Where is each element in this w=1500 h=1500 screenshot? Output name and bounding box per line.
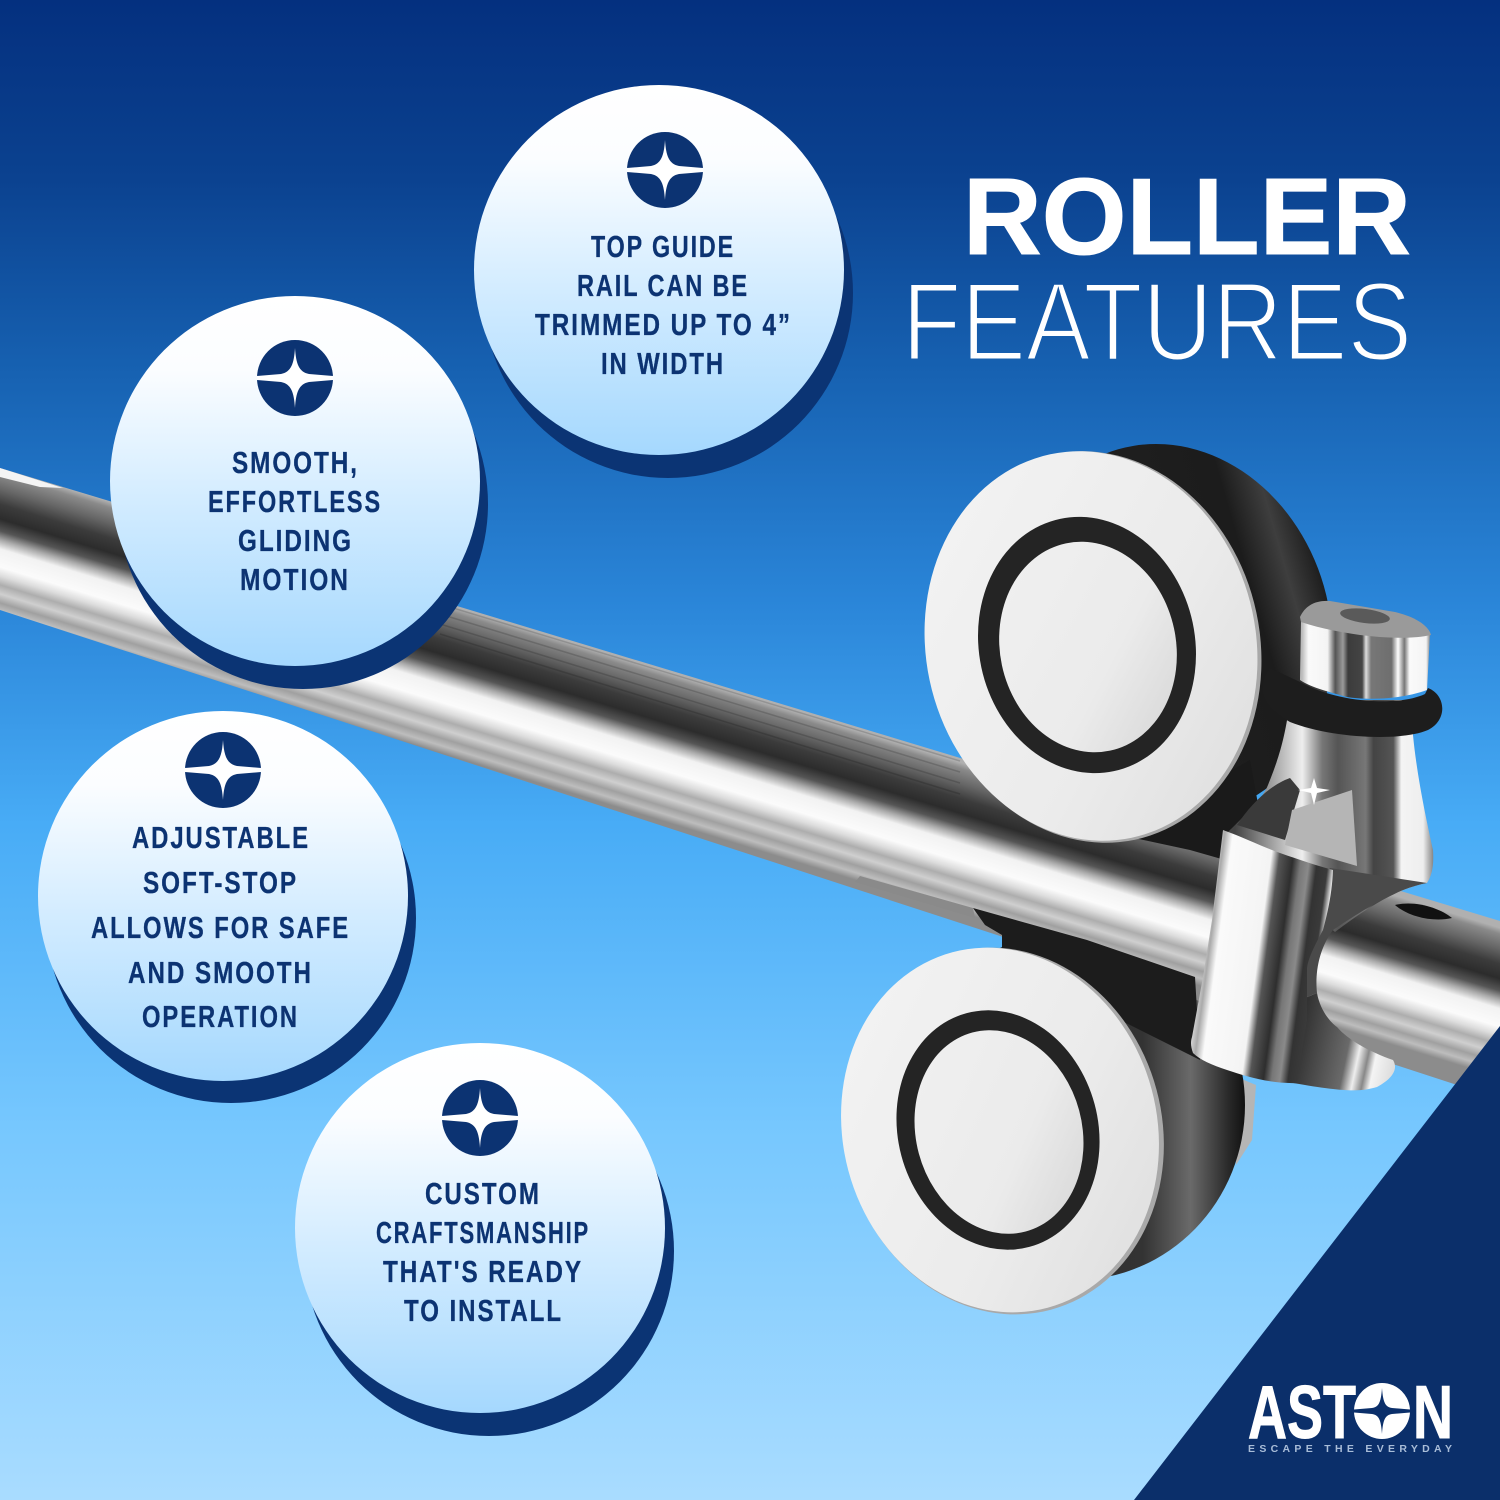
feature text: SOFT-STOP bbox=[143, 865, 298, 900]
lower roller face bbox=[801, 912, 1199, 1348]
upper roller ring bbox=[955, 496, 1219, 794]
cap body bbox=[1300, 622, 1430, 699]
lower roller rim bbox=[802, 911, 1204, 1351]
chrome rail bbox=[0, 468, 1500, 1099]
disc shadow bbox=[304, 1066, 674, 1436]
feature text bbox=[208, 445, 382, 597]
logo star O bbox=[1354, 1383, 1410, 1439]
panel: adjustable soft-stop bbox=[38, 711, 416, 1103]
upper roller button bbox=[980, 525, 1196, 769]
title bbox=[902, 156, 1412, 384]
lower axle sliver bbox=[1232, 1075, 1256, 1165]
arch dark bbox=[1300, 868, 1427, 1000]
feature text: EFFORTLESS bbox=[208, 484, 382, 519]
lower roller bracket bbox=[973, 908, 1200, 1060]
rail clamp base bbox=[1293, 993, 1395, 1090]
panel: custom craftsmanship bbox=[295, 1043, 674, 1436]
logo: Aston bbox=[1248, 1370, 1453, 1455]
wordmark right: N bbox=[1413, 1370, 1453, 1454]
upper roller shadow bbox=[1120, 760, 1260, 860]
feature text: AND SMOOTH bbox=[128, 955, 313, 990]
disc bbox=[110, 296, 480, 666]
post reflection plate bbox=[1285, 790, 1357, 866]
feature text: TRIMMED UP TO 4” bbox=[535, 307, 792, 342]
icon: star badge bbox=[442, 1080, 518, 1156]
icon: star badge bbox=[627, 132, 703, 208]
disc shadow bbox=[483, 108, 853, 478]
navy corner triangle bbox=[1134, 1026, 1500, 1500]
disc shadow bbox=[118, 319, 488, 689]
disc bbox=[38, 711, 408, 1081]
feature text: RAIL CAN BE bbox=[577, 268, 749, 303]
feature text: IN WIDTH bbox=[601, 346, 725, 381]
lower roller bbox=[801, 908, 1204, 1351]
feature text: TO INSTALL bbox=[404, 1293, 563, 1328]
feature text bbox=[535, 229, 792, 381]
wordmark left: AST bbox=[1248, 1370, 1356, 1454]
rail clamp barrel bbox=[1191, 830, 1333, 1083]
disc bbox=[474, 85, 844, 455]
panel: top guide rail bbox=[474, 85, 853, 478]
lower roller tyre bbox=[905, 930, 1245, 1280]
feature text: CRAFTSMANSHIP bbox=[376, 1215, 590, 1250]
feature text: OPERATION bbox=[142, 999, 299, 1034]
feature text: ALLOWS FOR SAFE bbox=[91, 910, 350, 945]
feature text: GLIDING bbox=[238, 523, 353, 558]
clamp post bbox=[1225, 700, 1433, 932]
disc bbox=[295, 1043, 665, 1413]
title line: ROLLER: ROLLER bbox=[963, 156, 1411, 278]
upper roller tyre bbox=[964, 405, 1376, 855]
cap top bbox=[1300, 601, 1431, 638]
feature text: THAT'S READY bbox=[383, 1254, 583, 1289]
disc shadow bbox=[46, 733, 416, 1103]
title line: FEATURES: FEATURES bbox=[902, 260, 1412, 384]
feature text: SMOOTH, bbox=[232, 445, 359, 480]
post glint bbox=[1298, 778, 1330, 805]
feature text: MOTION bbox=[240, 562, 350, 597]
rail slot bbox=[1395, 903, 1452, 919]
feature text bbox=[91, 820, 350, 1034]
icon: star badge bbox=[257, 340, 333, 416]
upper roller rim bbox=[891, 420, 1297, 874]
upper roller face bbox=[889, 420, 1293, 872]
tagline: ESCAPE THE EVERYDAY bbox=[1248, 1443, 1452, 1455]
upper roller bbox=[889, 405, 1376, 874]
lower roller ring bbox=[870, 987, 1126, 1273]
feature text: TOP GUIDE bbox=[591, 229, 735, 264]
feature text: ADJUSTABLE bbox=[132, 820, 310, 855]
lower roller button bbox=[892, 1011, 1106, 1253]
socket bbox=[1339, 606, 1391, 626]
icon: star badge bbox=[185, 732, 261, 808]
feature text bbox=[376, 1176, 590, 1328]
O-ring bbox=[1262, 668, 1442, 737]
feature text: CUSTOM bbox=[425, 1176, 541, 1211]
panel: smooth gliding bbox=[110, 296, 488, 689]
post reflection dark bbox=[1237, 778, 1300, 840]
roller clamp hardware bbox=[1191, 601, 1442, 1090]
